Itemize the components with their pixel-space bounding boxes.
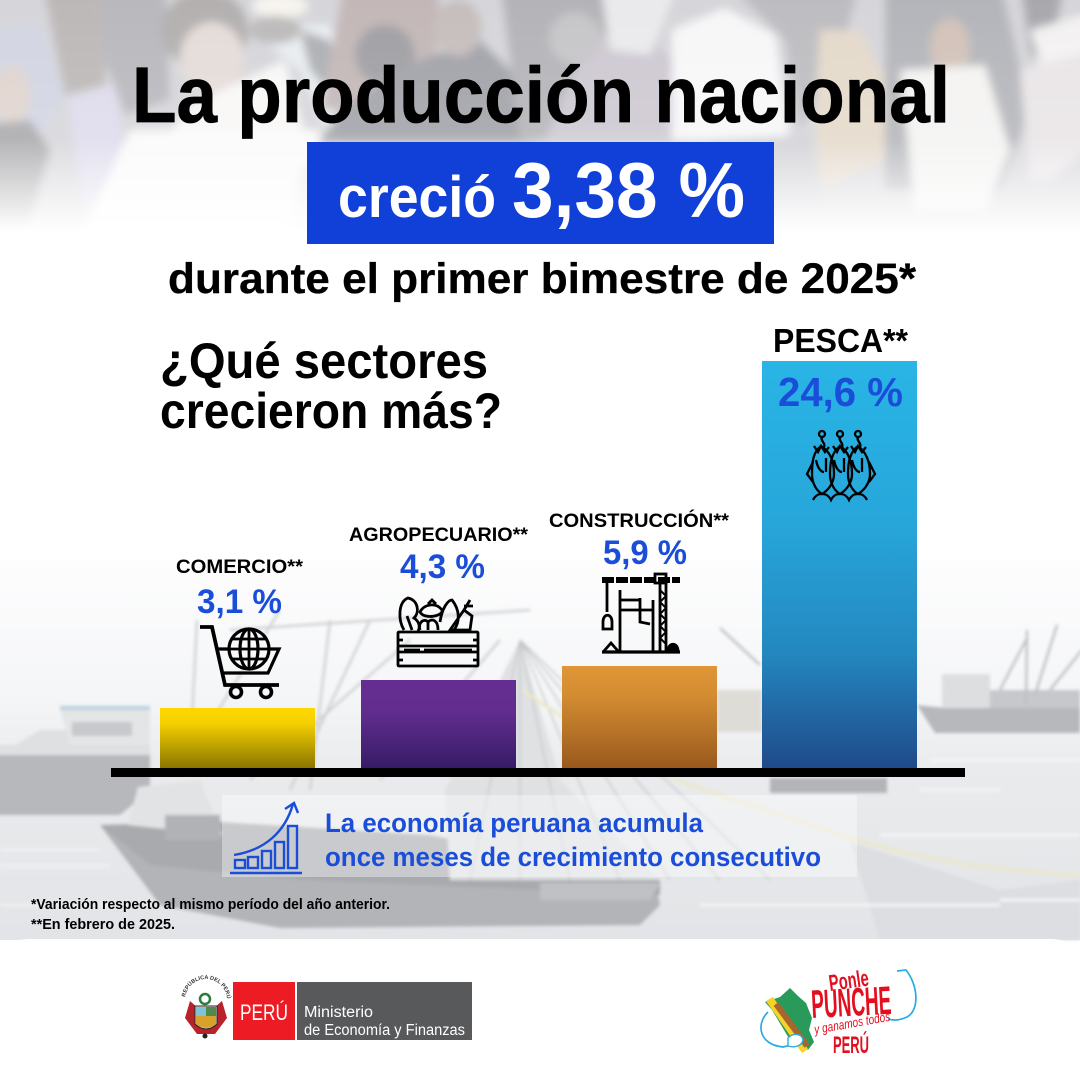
footnotes: **En febrero de 2025.: [31, 917, 175, 933]
distant and near boats: [0, 610, 1080, 940]
logo: Perú, Ministerio de Economía y Finanzas: PERÚ: [240, 1000, 288, 1025]
bar: pesca: [762, 322, 917, 768]
title: La producción nacional: [132, 50, 950, 139]
icon: rising bar chart with arrow: [230, 803, 302, 873]
footnotes: *Variación respecto al mismo período del año anterior.: [31, 897, 390, 913]
chart heading: ¿Qué sectores: [160, 333, 488, 389]
chart heading: crecieron más?: [160, 383, 502, 439]
bar: comercio: [160, 557, 315, 768]
callout: eleven months of growth: [222, 795, 857, 877]
highlight box: growth figure: [307, 142, 774, 244]
icon: three hanging fish: [807, 431, 875, 500]
logo: Perú, Ministerio de Economía y Finanzas: [233, 982, 472, 1040]
bar: agropecuario: 4,3 %: [400, 548, 485, 586]
icon: vegetable crate: [398, 598, 478, 666]
chart heading: [160, 333, 502, 439]
bar: agropecuario: [349, 525, 529, 768]
logo: coat of arms of Peru: REPÚBLICA DEL PERÚ: [182, 975, 232, 998]
subtitle: durante el primer bimestre de 2025*: [168, 255, 916, 303]
logo: Perú, Ministerio de Economía y Finanzas: Ministerio: [304, 1004, 373, 1021]
bar: pesca: 24,6 %: [778, 369, 903, 415]
highlight box: growth figure: creció: [338, 165, 496, 230]
bar: agropecuario: AGROPECUARIO**: [349, 525, 529, 546]
bar: pesca: PESCA**: [773, 322, 908, 359]
logo: Ponle Punche y ganamos todos Perú: Ponle: [827, 965, 870, 996]
logo: Ponle Punche y ganamos todos Perú: PUNCHE: [810, 979, 892, 1027]
logo: Ponle Punche y ganamos todos Perú: [761, 965, 916, 1059]
logo: Ponle Punche y ganamos todos Perú: y ganamos todos: [812, 1009, 892, 1037]
logo: coat of arms of Peru: [182, 975, 232, 1038]
highlight box: growth figure: 3,38 %: [512, 146, 745, 234]
footer panel: [0, 939, 1080, 1080]
bar: construcción: CONSTRUCCIÓN**: [549, 510, 730, 532]
bar: comercio: COMERCIO**: [176, 557, 304, 578]
callout: eleven months of growth: La economía peruana acumula: [325, 808, 704, 838]
chart baseline: [111, 768, 965, 777]
bar: comercio: 3,1 %: [197, 583, 282, 621]
callout: eleven months of growth: once meses de crecimiento consecutivo: [325, 842, 821, 872]
icon: tower crane: [602, 574, 680, 652]
footnotes: [31, 897, 390, 933]
icon: shopping cart with globe: [200, 627, 279, 698]
logo: Perú, Ministerio de Economía y Finanzas: de Economía y Finanzas: [304, 1022, 465, 1039]
bar: construcción: 5,9 %: [603, 534, 687, 572]
logo: Ponle Punche y ganamos todos Perú: PERÚ: [833, 1031, 869, 1059]
bar: construcción: [549, 510, 730, 768]
bar chart: sectors: [111, 322, 965, 777]
